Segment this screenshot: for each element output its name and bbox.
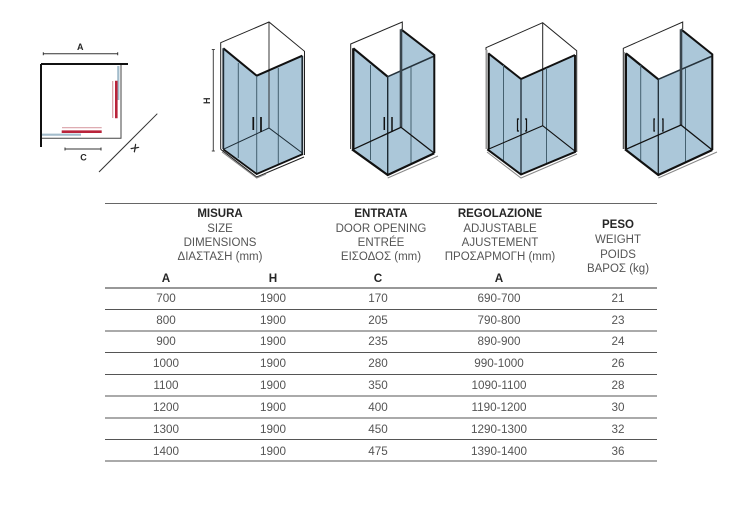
dimension C: C [80, 152, 87, 162]
row 1400: 1400 [153, 445, 179, 458]
row 1100: 28 [611, 379, 625, 392]
row 1300: 32 [611, 423, 625, 436]
row 1200: 30 [611, 401, 625, 414]
shower 4 [623, 22, 717, 178]
header: entrata: DOOR OPENING [336, 223, 426, 235]
shower 1 [221, 22, 304, 178]
door handles [654, 119, 663, 131]
header: regolazione: A [495, 272, 504, 285]
row 1100 [153, 379, 625, 392]
row 1300: 450 [368, 423, 388, 436]
row 800: 1900 [260, 314, 286, 327]
header: regolazione: AJUSTEMENT [462, 237, 538, 249]
dimension H [202, 49, 215, 151]
row 700: 21 [611, 292, 625, 305]
header: regolazione [445, 208, 555, 285]
header: entrata: ΕΙΣΟΔΟΣ (mm) [341, 251, 421, 263]
row 900 [156, 335, 625, 348]
door handles [253, 117, 261, 132]
header: peso: POIDS [600, 249, 636, 261]
row 700 [156, 292, 625, 305]
shower 2 [351, 22, 438, 178]
header: misura: MISURA [197, 208, 243, 220]
header: regolazione: ADJUSTABLE [463, 223, 537, 235]
row 1200: 1200 [153, 401, 179, 414]
header: entrata: C [374, 272, 383, 285]
row 1300 [153, 423, 625, 436]
header: entrata: ENTRÉE [358, 236, 405, 249]
row 1100: 350 [368, 379, 388, 392]
row 1300: 1300 [153, 423, 179, 436]
header: regolazione: ΠΡΟΣΑΡΜΟΓΗ (mm) [445, 251, 555, 263]
row 1300: 1290-1300 [471, 423, 527, 436]
row 1400 [153, 445, 625, 458]
row 1400: 36 [611, 445, 625, 458]
header: entrata [336, 208, 426, 285]
dimension A: A [77, 42, 84, 52]
header: misura: A [162, 272, 171, 285]
header: peso: PESO [602, 219, 634, 231]
row 1100: 1900 [260, 379, 286, 392]
row 800: 790-800 [478, 314, 521, 327]
row 900: 1900 [260, 335, 286, 348]
row 900: 24 [611, 335, 625, 348]
header: misura: DIMENSIONS [184, 237, 257, 249]
row 1000: 26 [611, 357, 625, 370]
row 1300: 1900 [260, 423, 286, 436]
row 1400: 475 [368, 445, 388, 458]
header: peso: WEIGHT [595, 234, 641, 246]
row 1200 [153, 401, 625, 414]
row 900: 235 [368, 335, 388, 348]
row 1200: 1900 [260, 401, 286, 414]
row 900: 900 [156, 335, 176, 348]
row 700: 690-700 [478, 292, 521, 305]
row 800: 205 [368, 314, 388, 327]
row 800 [156, 314, 625, 327]
row 800: 800 [156, 314, 176, 327]
row 1200: 1190-1200 [471, 401, 527, 414]
row 700: 700 [156, 292, 176, 305]
header: misura [162, 208, 277, 285]
dimension X: X [128, 142, 141, 155]
door handles [384, 117, 392, 132]
row 1100: 1090-1100 [471, 379, 527, 392]
table rules [105, 204, 657, 461]
header: peso: ΒΑΡΟΣ (kg) [587, 263, 649, 275]
dimension H: H [202, 97, 212, 104]
header: entrata: ENTRATA [354, 208, 408, 220]
row 1100: 1100 [153, 379, 179, 392]
row 700: 1900 [260, 292, 286, 305]
header: regolazione: REGOLAZIONE [458, 208, 542, 220]
row 1400: 1390-1400 [471, 445, 527, 458]
row 1000: 1000 [153, 357, 179, 370]
row 1000: 280 [368, 357, 388, 370]
header: misura: H [269, 272, 277, 285]
row 1400: 1900 [260, 445, 286, 458]
row 1200: 400 [368, 401, 388, 414]
header: misura: SIZE [207, 223, 233, 235]
shower 3 [486, 23, 577, 178]
header: misura: ΔΙΑΣΤΑΣΗ (mm) [178, 251, 263, 263]
row 700: 170 [368, 292, 388, 305]
row 1000: 990-1000 [474, 357, 524, 370]
header: peso [587, 219, 649, 275]
row 900: 890-900 [478, 335, 521, 348]
plan diagram [41, 42, 157, 172]
table [105, 204, 657, 461]
row 1000 [153, 357, 625, 370]
row 1000: 1900 [260, 357, 286, 370]
door handles [518, 119, 526, 131]
row 800: 23 [611, 314, 625, 327]
